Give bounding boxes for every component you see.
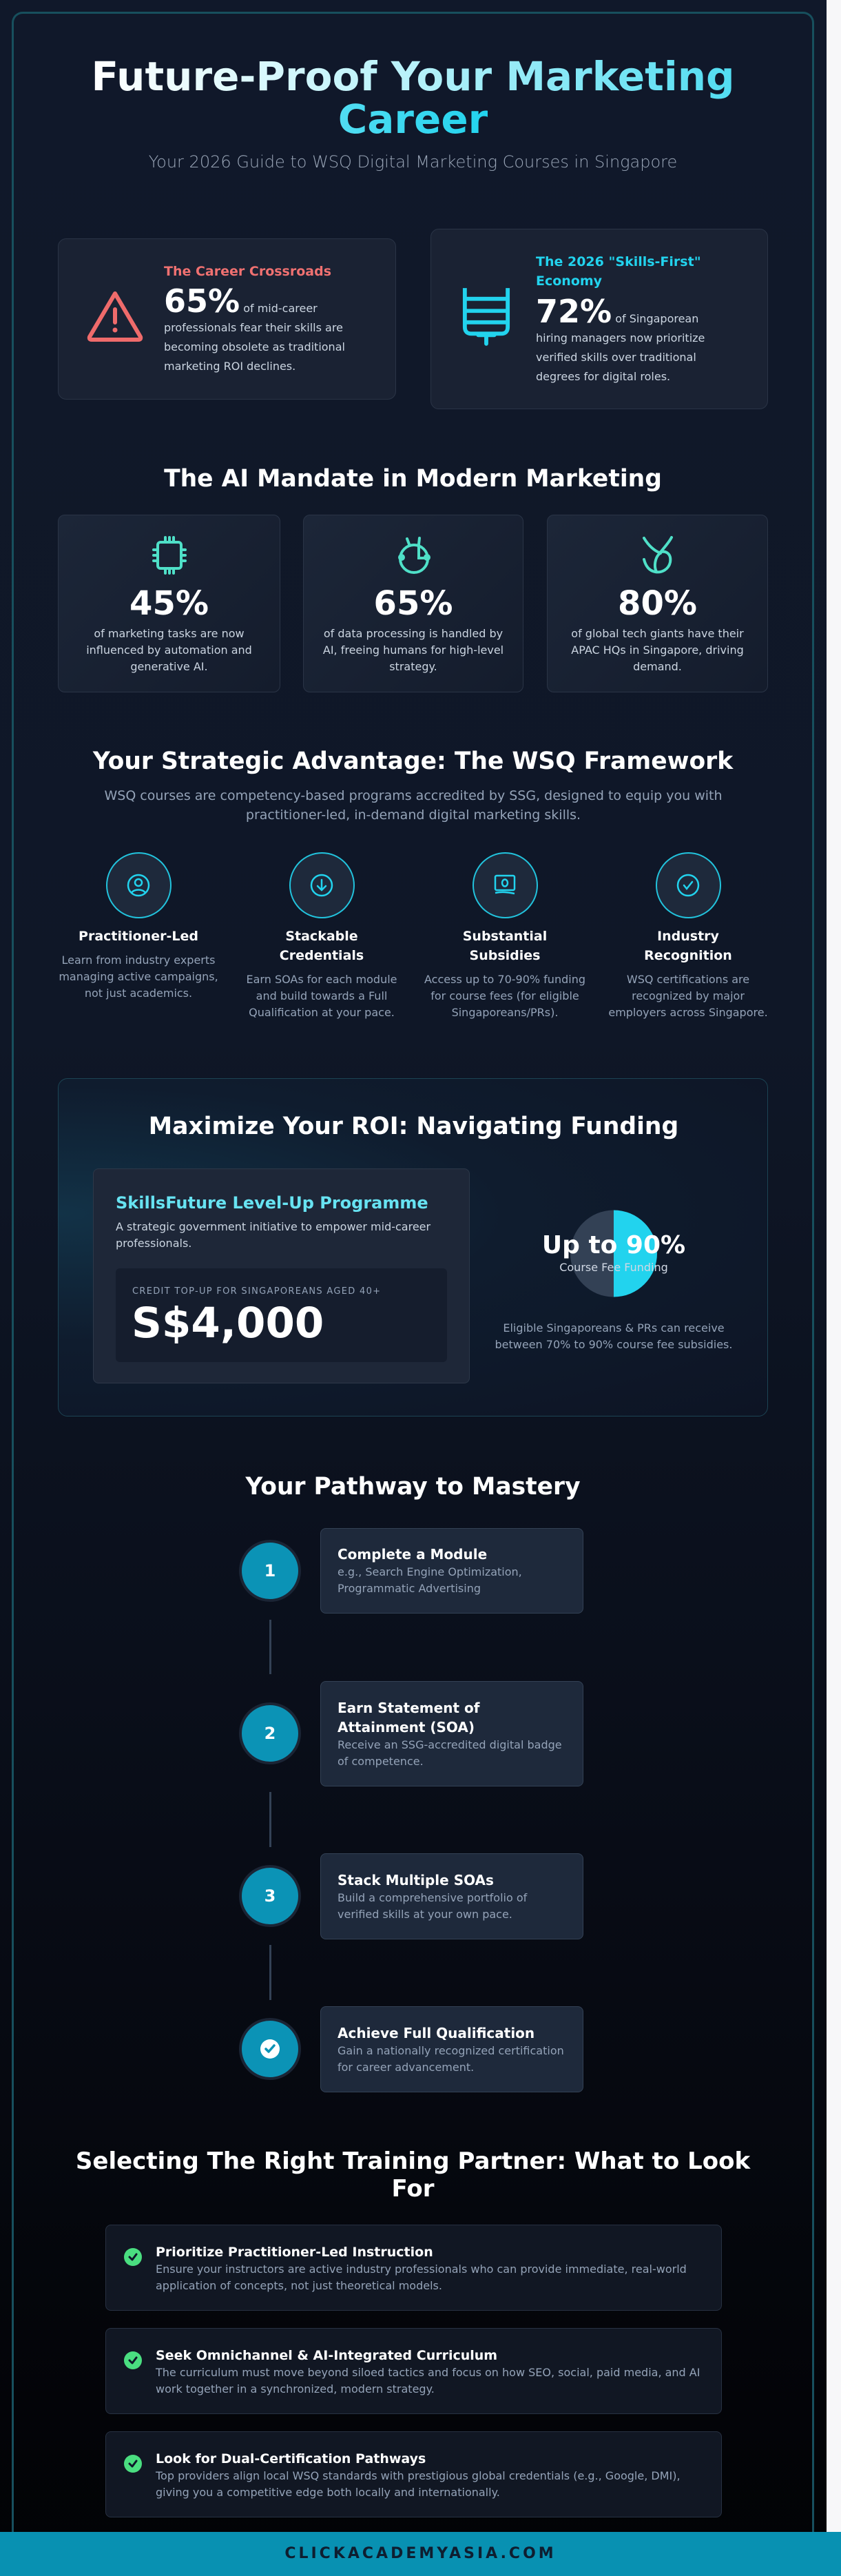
pie label: Up to 90%: [542, 1231, 685, 1259]
icon: brain/clock: [398, 537, 430, 574]
criterion 3: Look for Dual-Certification Pathways: [156, 2451, 426, 2466]
stat text: 65% of mid-career professionals fear their skills are becoming obsolete as traditional marketing ROI declines.: [164, 282, 345, 373]
pie label: [542, 1231, 685, 1274]
text: Stack Multiple SOAs: [338, 1871, 494, 1888]
footer: [0, 2532, 841, 2576]
icon: stacked server: [463, 288, 510, 346]
heading: training partner: Selecting The Right Training Partner: What to Look: [76, 2147, 750, 2175]
credit box: S$4,000: [132, 1299, 324, 1348]
feature: industry recognition: Recognition: [644, 948, 732, 963]
feature: stackable credentials: Stackable: [285, 929, 358, 944]
feature: subsidies: Substantial: [463, 929, 547, 944]
step 1: [239, 1540, 301, 1602]
heading: training partner: [76, 2147, 751, 2203]
text: Achieve Full Qualification: [338, 2024, 534, 2041]
stat: 65%: [374, 584, 453, 623]
card: SkillsFuture: [93, 1168, 470, 1383]
panel: career crossroads: [58, 238, 396, 400]
criterion 2: Seek Omnichannel & AI-Integrated Curriculum: [156, 2348, 497, 2363]
feature: subsidies: [424, 852, 585, 1019]
icon: money: [473, 852, 537, 918]
heading: WSQ framework: Your Strategic Advantage: The WSQ Framework: [93, 748, 733, 775]
caption: Eligible Singaporeans & PRs can receive between 70% to 90% course fee subsidies.: [495, 1321, 732, 1351]
text: Complete a Module: [338, 1546, 487, 1563]
panel: AI stat 65%: [303, 515, 523, 692]
step 3: 3: [264, 1886, 276, 1906]
panel: funding: [58, 1078, 768, 1416]
title: [91, 53, 735, 143]
criterion 2: The curriculum must move beyond siloed tactics and focus on how SEO, social, paid media, and AI work together in a synchronized, modern strategy.: [156, 2366, 700, 2395]
heading: AI mandate: The AI Mandate in Modern Marketing: [164, 465, 662, 493]
text: Earn Statement of Attainment (SOA): [338, 1699, 479, 1735]
desc: of marketing tasks are now influenced by automation and generative AI.: [86, 627, 252, 673]
stat: 45%: [129, 584, 209, 623]
heading: The 2026 "Skills-First" Economy: [536, 254, 701, 289]
panel: AI stat 45%: [58, 515, 280, 692]
step 1: 1: [264, 1561, 276, 1580]
step 2: 2: [264, 1724, 276, 1743]
pie label: Course Fee Funding: [559, 1261, 668, 1274]
feature: stackable credentials: [247, 852, 397, 1019]
text: WSQ intro: WSQ courses are competency-based programs accredited by SSG, designed to equip you with practitioner-led, in-demand digital marketing skills.: [104, 788, 723, 823]
step 4: [239, 2018, 301, 2080]
footer: CLICKACADEMYASIA.COM: [284, 2545, 557, 2562]
card: SkillsFuture: SkillsFuture Level-Up Programme: [116, 1193, 428, 1213]
stat: 80%: [618, 584, 697, 623]
icon: check circle: [656, 852, 720, 918]
text: Receive an SSG-accredited digital badge of competence.: [338, 1738, 562, 1768]
panel: skills-first economy: [430, 229, 768, 409]
card: SkillsFuture: A strategic government initiative to empower mid-career professionals.: [116, 1220, 430, 1250]
panel: AI stat 80%: [547, 515, 768, 692]
heading: pathway: Your Pathway to Mastery: [245, 1473, 581, 1501]
icon: chip: [152, 536, 187, 575]
text: e.g., Search Engine Optimization, Programmatic Advertising: [338, 1565, 522, 1595]
criterion 1: Prioritize Practitioner-Led Instruction: [156, 2245, 433, 2260]
icon: person: [106, 852, 171, 918]
criterion 3: [105, 2431, 722, 2517]
subtitle: Your 2026 Guide to WSQ Digital Marketing Courses in Singapore: [149, 152, 677, 172]
feature: stackable credentials: Credentials: [280, 948, 364, 963]
criterion 1: Ensure your instructors are active industry professionals who can provide immediate, real-world application of concepts, not just theoretical models.: [156, 2263, 687, 2292]
stat text: 72% of Singaporean hiring managers now prioritize verified skills over traditional degrees for digital roles.: [536, 293, 705, 383]
feature: subsidies: Subsidies: [470, 948, 540, 963]
feature: subsidies: Access up to 70-90% funding for course fees (for eligible Singaporeans/PRs).: [424, 973, 585, 1019]
text: Gain a nationally recognized certification for career advancement.: [338, 2043, 564, 2074]
feature: practitioner-led: Practitioner-Led: [79, 929, 198, 944]
step 2: [239, 1702, 301, 1764]
criterion 3: Top providers align local WSQ standards with prestigious global credentials (e.g., Google, DMI), giving you a competitive edge both locally and internationally.: [156, 2469, 681, 2499]
feature: practitioner-led: Learn from industry experts managing active campaigns, not just academics.: [59, 954, 218, 1000]
feature: industry recognition: Industry: [657, 929, 719, 944]
icon: warning triangle: [87, 291, 143, 342]
heading: The Career Crossroads: [164, 264, 331, 279]
text: Build a comprehensive portfolio of verified skills at your own pace.: [338, 1890, 527, 1921]
title: Future-Proof Your Marketing: [91, 53, 735, 100]
step 3: [239, 1865, 301, 1927]
heading: Maximize Your ROI: Navigating Funding: [149, 1113, 678, 1140]
title: Career: [338, 96, 488, 143]
feature: industry recognition: WSQ certifications are recognized by major employers across Singapore.: [608, 973, 768, 1019]
credit box: CREDIT TOP-UP FOR SINGAPOREANS AGED 40+: [132, 1286, 381, 1297]
feature: industry recognition: [608, 852, 768, 1019]
heading: training partner: For: [391, 2175, 434, 2203]
desc: of data processing is handled by AI, freeing humans for high-level strategy.: [323, 627, 503, 673]
feature: practitioner-led: [59, 852, 218, 1000]
chart: pie: [570, 1210, 657, 1297]
icon: arrow down: [289, 852, 354, 918]
credit box: [116, 1268, 447, 1362]
feature: stackable credentials: Earn SOAs for each module and build towards a Full Qualification at your pace.: [247, 973, 397, 1019]
criterion 1: [105, 2225, 722, 2311]
criterion 2: [105, 2328, 722, 2414]
desc: of global tech giants have their APAC HQs in Singapore, driving demand.: [571, 627, 744, 673]
icon: globe-like: [642, 536, 674, 573]
